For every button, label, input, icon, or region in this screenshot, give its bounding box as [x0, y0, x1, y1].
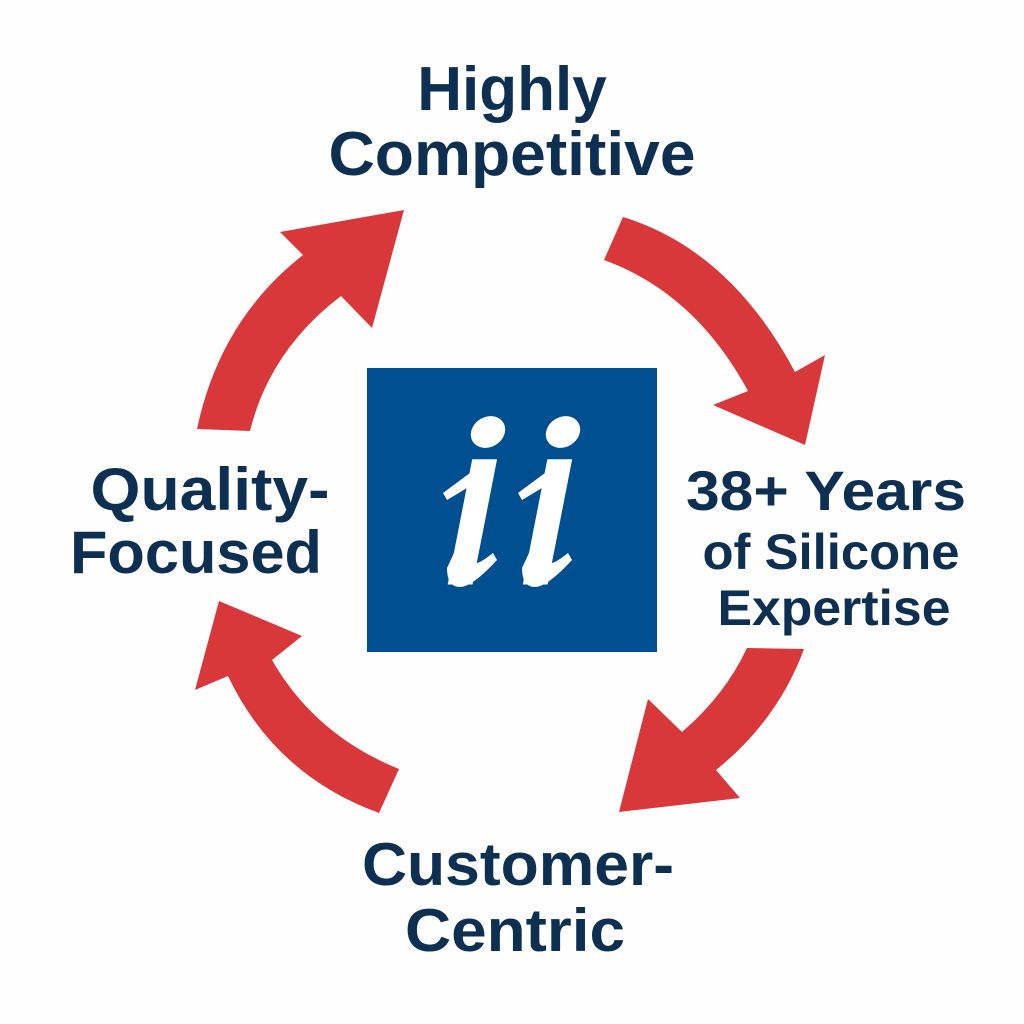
- label: Quality-Focused: [70, 456, 330, 586]
- arrow: top left: [197, 210, 404, 431]
- arrow: bottom left: [195, 601, 399, 813]
- label: Customer-Centric: Centric: [405, 897, 625, 964]
- label: Quality-Focused: Quality-: [90, 456, 330, 523]
- logo: blue square with ii: [367, 368, 657, 652]
- label: Customer-Centric: Customer-: [362, 831, 674, 898]
- heading: Highly Competitive: Highly: [417, 55, 607, 124]
- label: 38+ Years of Silicone Expertise: 38+ Years: [686, 459, 966, 522]
- arrow: bottom right: [619, 648, 804, 812]
- logo: blue square with ii: ii: [443, 378, 593, 634]
- arrow: top right: [604, 217, 825, 445]
- label: Customer-Centric: [362, 831, 674, 964]
- label: 38+ Years of Silicone Expertise: Expertise: [718, 580, 950, 636]
- heading: Highly Competitive: Competitive: [328, 120, 696, 189]
- label: 38+ Years of Silicone Expertise: of Silicone: [702, 524, 960, 580]
- heading: Highly Competitive: [328, 55, 696, 189]
- label: 38+ Years of Silicone Expertise: [686, 459, 966, 636]
- label: Quality-Focused: Focused: [70, 519, 322, 586]
